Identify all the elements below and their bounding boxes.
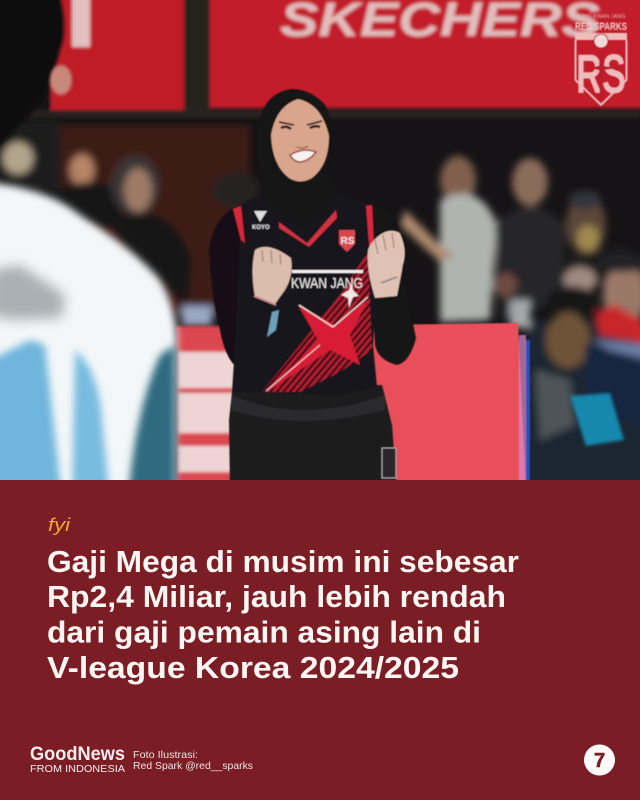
koyo logo (254, 211, 267, 222)
logo ball (594, 34, 608, 48)
logo top bar (575, 33, 627, 40)
logo shield outline (576, 40, 626, 105)
shorts badge (382, 448, 396, 478)
ear (50, 65, 72, 95)
heading (47, 545, 519, 685)
arena background (10, 78, 640, 480)
eyebrow label fyi: fyi (48, 515, 71, 535)
blurred shirt (0, 181, 177, 500)
left fist (252, 247, 292, 304)
red star logo (267, 300, 368, 392)
badge circle (584, 744, 615, 776)
blue card (570, 393, 624, 446)
brand name: GoodNews (30, 744, 125, 765)
main player (209, 89, 416, 490)
heading line 1: Gaji Mega di musim ini sebesar (47, 545, 519, 579)
koyo mark: KOYO (252, 225, 270, 231)
red stripes panel (262, 252, 372, 392)
right fist (368, 231, 405, 298)
shorts sheen (231, 395, 385, 421)
page number badge (584, 744, 615, 776)
red board behind player (370, 323, 530, 490)
crest letters: RS (340, 236, 355, 247)
sponsor text: KWAN JANG (291, 276, 363, 292)
credit line 2: Red Spark @red__sparks (133, 760, 253, 772)
small star (341, 284, 359, 308)
panel: caption background (0, 480, 640, 800)
red sign left (176, 326, 238, 486)
left fingers (262, 250, 281, 265)
panel: photo of player celebrating (0, 0, 640, 500)
logo star (584, 50, 620, 103)
wrist band left (254, 296, 276, 305)
credit line 1: Foto Ilustrasi: (133, 749, 198, 761)
mouth (290, 150, 316, 162)
left arm (208, 208, 240, 365)
badge number: 7 (594, 750, 605, 772)
right fingers (375, 233, 394, 254)
jersey (232, 193, 377, 395)
brand tagline: FROM INDONESIA (30, 764, 125, 775)
shorts (229, 385, 397, 490)
logo small caption: JUNG KWAN JANG (576, 14, 626, 20)
sponsor bar (292, 270, 363, 273)
foreground figure: blurred referee (0, 0, 177, 500)
eyes (281, 126, 320, 129)
blurred crowd right (400, 156, 640, 490)
sleeve number (267, 310, 279, 337)
jersey side trim left (233, 206, 245, 243)
club crest (339, 230, 355, 252)
shirt blue stripes (0, 340, 175, 500)
brand logo GoodNews from Indonesia (30, 744, 125, 775)
club logo (575, 14, 627, 105)
heading line 2: Rp2,4 Miliar, jauh lebih rendah (47, 580, 506, 614)
white lower line (266, 345, 320, 391)
heading line 3: dari gaji pemain asing lain di (47, 616, 481, 650)
shirt lettering smudge (0, 265, 65, 320)
face (271, 99, 329, 182)
wrist band right (381, 277, 397, 283)
right arm (372, 205, 416, 365)
eyebrows (279, 121, 322, 125)
white jersey line (299, 297, 368, 327)
jersey collar (279, 210, 337, 247)
advertising banners (0, 0, 640, 118)
jersey side trim right (366, 205, 374, 245)
blurred crowd left (0, 120, 260, 326)
nose (297, 146, 308, 148)
hijab (260, 88, 330, 182)
blurred head (0, 0, 64, 150)
heading line 4: V-league Korea 2024/2025 (47, 651, 459, 685)
photo credit (133, 749, 253, 772)
